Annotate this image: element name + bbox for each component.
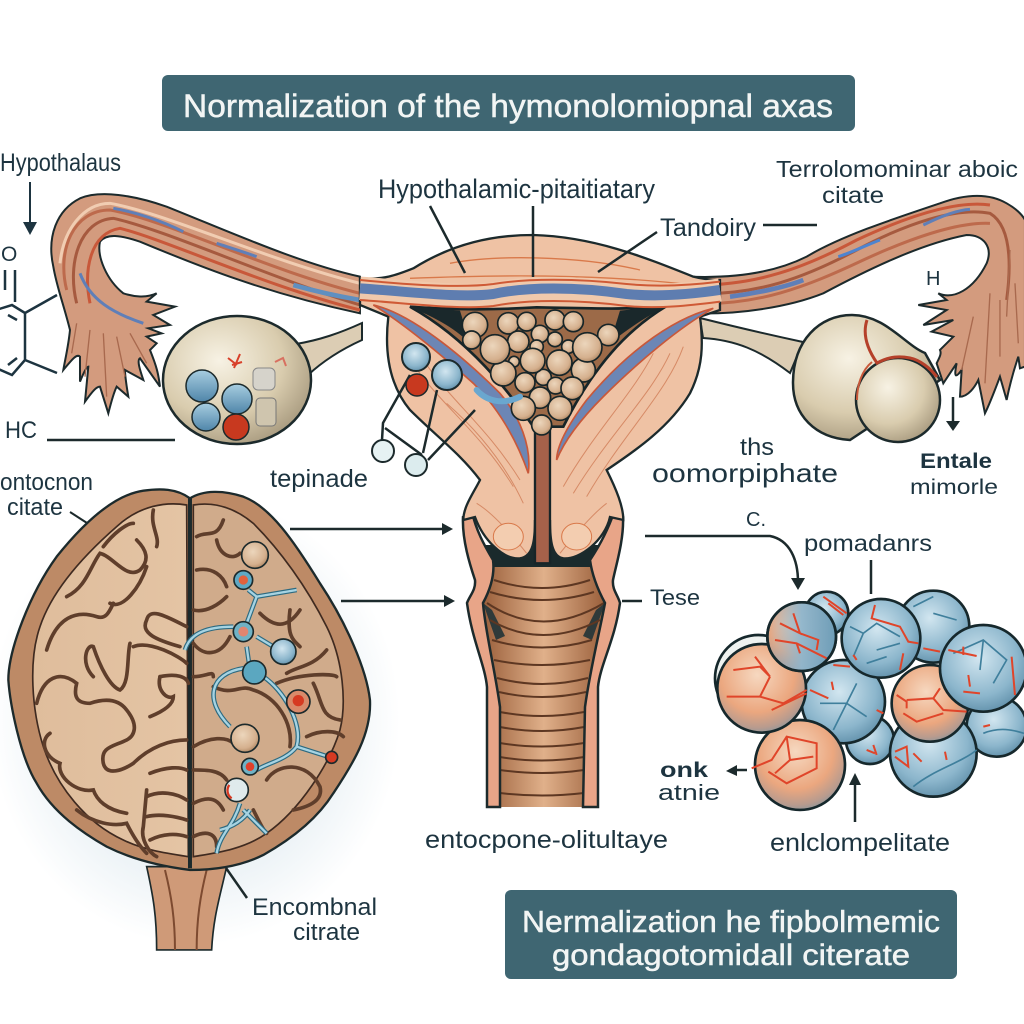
label: Encombnal citrate — [226, 868, 377, 946]
label: Hypothalaus — [0, 149, 121, 235]
label: entocnon citate: ontocnon — [0, 469, 93, 496]
uterus body — [360, 235, 720, 563]
label: O: O — [1, 243, 17, 266]
bottom banner: gondagotomidall citerate — [552, 939, 910, 972]
medication molecule near uterus — [372, 343, 475, 476]
chemical structure icon — [0, 270, 57, 375]
arrow: right ovary down — [946, 397, 960, 431]
label: onk atnie: atnie — [658, 780, 720, 805]
label: Hypothalamic-pituitary: Hypothalamic-pitaitiatary — [378, 174, 655, 204]
right blue strip — [557, 308, 713, 460]
title banner: Normalization of the hymonolomiopnal axas — [183, 88, 833, 124]
label: ths oomorpiphate: ths — [740, 434, 774, 461]
arrow: up to cluster — [849, 773, 861, 822]
red veins — [727, 597, 1015, 783]
label: tepinade: tepinade — [270, 465, 368, 493]
title banner — [162, 75, 855, 131]
label: onk atnie: onk — [660, 759, 708, 782]
molecule network — [185, 590, 333, 853]
label: Encombnal citrate: Encombnal — [252, 894, 377, 921]
label: Tese — [622, 585, 700, 610]
right sulci — [193, 520, 343, 847]
label: Tandoiry: Tandoiry — [660, 214, 757, 242]
left blue strip — [373, 305, 529, 473]
label: ths oomorpiphate: C. — [746, 509, 766, 531]
left ovary — [163, 316, 362, 444]
label: Hypothalamic-pituitary — [378, 174, 657, 277]
label: entocnon citate — [0, 469, 93, 523]
cells — [462, 310, 619, 435]
label: ths oomorpiphate — [652, 434, 838, 531]
label: Entale mimorle — [910, 450, 998, 499]
arrow: brain to cervix top — [290, 523, 453, 535]
brain outer — [8, 489, 370, 870]
right hemisphere — [193, 504, 343, 857]
label: H: H — [926, 268, 940, 290]
blue hook — [477, 390, 520, 401]
label: pomadanrs: pomadanrs — [804, 530, 932, 556]
label: top right: citate — [822, 182, 884, 208]
left fallopian tube — [51, 194, 360, 413]
stipple haze behind brain — [0, 495, 400, 945]
label: ths oomorpiphate: oomorpiphate — [652, 458, 838, 488]
canal walls — [463, 512, 623, 807]
left hemisphere — [33, 504, 188, 857]
bottom banner — [505, 890, 957, 979]
brain — [8, 489, 370, 950]
uterine cavity — [410, 306, 667, 427]
label: top right — [776, 156, 1018, 208]
label: pomadanrs — [804, 530, 932, 594]
blue veins — [820, 597, 1024, 787]
label: Hypothalaus: Hypothalaus — [0, 149, 121, 177]
lobe ovals — [493, 523, 523, 550]
muscle streaks — [407, 347, 683, 553]
label: Encombnal citrate: citrate — [293, 919, 360, 946]
label: Tese: Tese — [650, 585, 700, 610]
bottom banner: Nermalization he fipbolmemic — [522, 904, 940, 939]
fundus stripes — [410, 258, 693, 285]
label: Entale mimorle: mimorle — [910, 476, 998, 499]
label: enlclompelitate: enlclompelitate — [770, 829, 950, 857]
label: HC: HC — [5, 417, 37, 444]
left sulci — [37, 510, 188, 857]
right ovary — [700, 315, 940, 442]
label: top right: Terrolomominar aboic — [776, 156, 1018, 182]
vaginal canal — [470, 545, 612, 807]
label: Entale mimorle: Entale — [920, 450, 992, 473]
label: entocnon citate: citate — [7, 494, 63, 521]
arrow: cervix to cluster — [645, 536, 805, 590]
horizontal band — [360, 280, 720, 307]
brain stem — [147, 867, 227, 950]
label: onk atnie — [658, 759, 747, 805]
arrow: brain to canal — [341, 595, 455, 607]
label: entocpone: entocpone-olitultaye — [425, 826, 668, 854]
central narrow canal — [535, 430, 550, 563]
right fallopian tube — [690, 196, 1024, 413]
follicle cell cluster — [715, 591, 1024, 810]
